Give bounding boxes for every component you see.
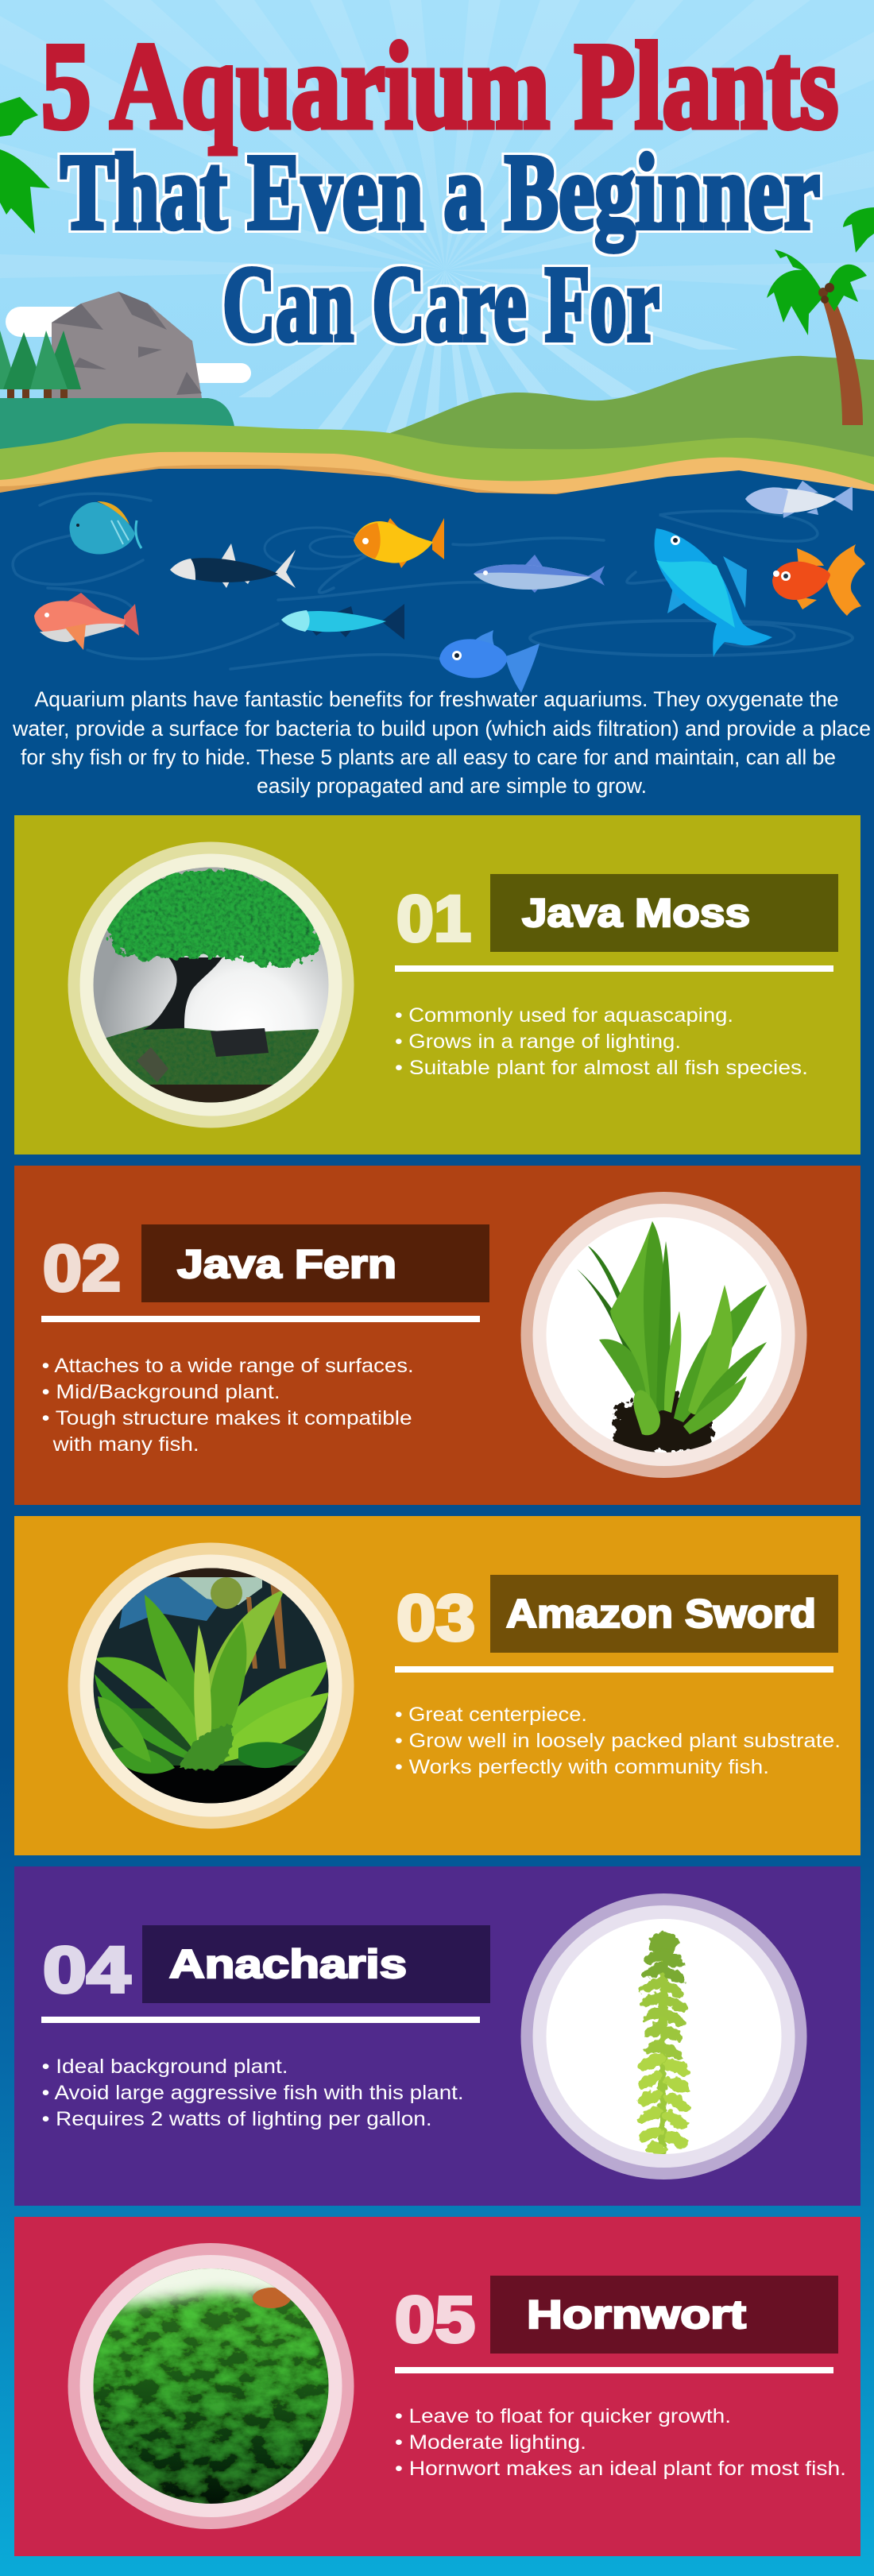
photo circle: anacharis (521, 1893, 807, 2180)
fish: goldfish (772, 544, 865, 616)
palm tree right (767, 207, 874, 425)
panel: 05 Hornwort (14, 2217, 860, 2556)
bullet list: • Avoid large aggressive fish with this plant. (42, 2082, 464, 2104)
bullet list: • Requires 2 watts of lighting per gallon. (42, 2108, 432, 2130)
bullet list: • Grow well in loosely packed plant substrate. (395, 1730, 841, 1752)
fish: blue-grey (474, 555, 605, 593)
photo circle: java moss (68, 842, 354, 1128)
bullet list: • Leave to float for quicker growth. (395, 2405, 731, 2427)
palm fronds left (0, 97, 50, 234)
fish: large blue (655, 528, 772, 657)
intro paragraph: easily propagated and are simple to grow. (257, 774, 647, 798)
bullet list: • Ideal background plant. (42, 2056, 288, 2078)
panel: 03 Amazon Sword (14, 1516, 860, 1855)
title bar (490, 2276, 838, 2354)
fish: black and white (170, 543, 296, 588)
bullet list: • Moderate lighting. (395, 2431, 586, 2454)
bullet list: • Mid/Background plant. (42, 1381, 280, 1403)
pine trees (0, 331, 81, 398)
bullet list (42, 2056, 464, 2130)
fish: discus (70, 501, 141, 555)
panel: 02 Java Fern (14, 1166, 860, 1505)
intro paragraph: for shy fish or fry to hide. These 5 plants are all easy to care for and maintain, can all be (21, 745, 836, 769)
panel: 01 Java Moss (14, 815, 860, 1155)
clouds (6, 307, 251, 383)
title bar: Hornwort (527, 2292, 746, 2337)
number 05: 05 (395, 2284, 475, 2356)
beach sand (0, 452, 874, 524)
scene: sky, hills and beach (0, 0, 874, 524)
title bar (142, 1925, 490, 2003)
intro paragraph: Aquarium plants have fantastic benefits for freshwater aquariums. They oxygenate the (35, 687, 839, 711)
bullet list (395, 1004, 808, 1079)
bullet list: • Great centerpiece. (395, 1704, 587, 1726)
panel: 04 Anacharis (14, 1866, 860, 2206)
title bar: Java Moss (522, 891, 750, 935)
fish: gold (354, 518, 444, 568)
fish: blue (439, 630, 539, 693)
bullet list: with many fish. (52, 1433, 199, 1456)
bullet list: • Grows in a range of lighting. (395, 1031, 681, 1053)
rock mountain (52, 292, 202, 398)
bullet list: • Attaches to a wide range of surfaces. (42, 1355, 414, 1377)
photo circle: amazon sword (68, 1543, 354, 1829)
title bar: Java Fern (177, 1242, 396, 1286)
intro paragraph (12, 687, 871, 798)
fish: coral (34, 593, 139, 650)
bullet list: • Suitable plant for almost all fish species. (395, 1057, 808, 1079)
number 02: 02 (43, 1232, 121, 1305)
number 01: 01 (396, 883, 471, 955)
title bar (490, 1575, 838, 1653)
fish illustrations (34, 481, 865, 693)
fish: cyan (281, 604, 404, 640)
title line 3: Can Care For (222, 245, 659, 364)
bullet list (395, 1704, 841, 1778)
title (41, 17, 838, 364)
bullet list: • Works perfectly with community fish. (395, 1756, 769, 1778)
photo circle: hornwort (68, 2243, 354, 2529)
intro paragraph: water, provide a surface for bacteria to build upon (which aids filtration) and provide a place (12, 717, 871, 741)
title bar: Amazon Sword (506, 1592, 816, 1636)
bullet list: • Commonly used for aquascaping. (395, 1004, 733, 1027)
water ripples (13, 493, 853, 669)
title bar (490, 874, 838, 952)
sky (0, 0, 874, 477)
number 04: 04 (43, 1934, 130, 2006)
title bar: Anacharis (169, 1942, 407, 1986)
back hill (390, 356, 874, 493)
bullet list: • Hornwort makes an ideal plant for most fish. (395, 2458, 846, 2480)
fish: pale grey (745, 481, 853, 518)
front green shore (0, 424, 874, 509)
number 03: 03 (396, 1582, 475, 1654)
bullet list: • Tough structure makes it compatible (42, 1407, 412, 1429)
title bar (141, 1224, 489, 1302)
bullet list (395, 2405, 846, 2480)
bullet list (42, 1355, 414, 1456)
island (0, 398, 236, 477)
photo circle: java fern (521, 1192, 807, 1478)
sun rays (0, 0, 874, 445)
